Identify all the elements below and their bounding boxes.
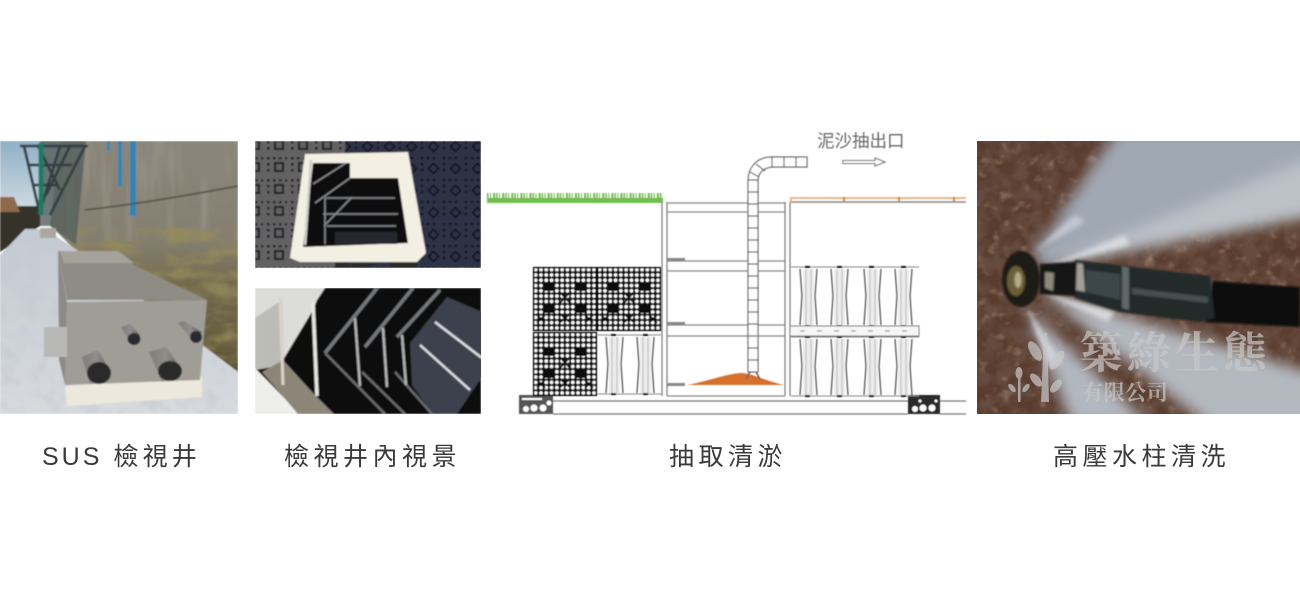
well top: [58, 251, 207, 300]
well side: [58, 251, 67, 385]
inner ladders: [305, 160, 398, 245]
caption 3: 抽取清淤: [669, 443, 787, 471]
building wall: [50, 141, 238, 375]
metal fitting: [1040, 260, 1215, 322]
gravel left: [519, 395, 553, 414]
outlet arrow: [843, 158, 885, 166]
jet cores: [1027, 215, 1130, 368]
lower water jets: [1025, 290, 1300, 430]
nozzle ball: [1002, 251, 1040, 307]
caption 1: SUS 檢視井: [42, 443, 201, 471]
photo: well interior: [255, 287, 482, 414]
left white surfaces: [255, 288, 325, 360]
orange sludge: [687, 373, 784, 385]
roof floor: [0, 229, 238, 414]
shaft brackets: [667, 258, 685, 386]
frame feet: [335, 262, 417, 268]
well floor: [335, 232, 397, 244]
white frame: [290, 152, 426, 262]
filled modules: [533, 267, 661, 396]
wall weathering: [66, 228, 238, 364]
dark interior: [255, 288, 481, 414]
distant machinery: [0, 197, 20, 212]
outlet label: 泥沙抽出口: [817, 131, 904, 151]
black hose: [1205, 281, 1300, 327]
well front: [65, 300, 207, 385]
wall cable: [85, 186, 238, 210]
photo: SUS inspection well: [0, 141, 238, 414]
brown ground: [977, 141, 1300, 414]
photo 1 contents: [0, 141, 238, 414]
ground light grain: [977, 141, 1300, 414]
watermark tree icon: [1007, 333, 1067, 402]
suction hose: [746, 157, 807, 379]
well base: [65, 376, 202, 406]
paving surface: [791, 197, 966, 203]
wood ledge: [262, 360, 334, 414]
watermark company type: 有限公司: [1082, 380, 1168, 405]
open modules right: [790, 267, 919, 396]
inspection shaft: [662, 202, 966, 396]
ground dark grain: [977, 141, 1300, 414]
floor texture: [0, 350, 214, 413]
sky: [0, 141, 60, 216]
distant ground: [0, 206, 40, 252]
steel canopy: [20, 143, 88, 215]
photo 3 contents: [255, 287, 482, 414]
photo: high pressure jet: [977, 130, 1300, 430]
gravel right: [908, 395, 940, 414]
large pipes: [82, 347, 182, 384]
grass surface: [487, 196, 663, 203]
distant well: [40, 228, 56, 238]
watermark: [1007, 329, 1271, 405]
metal rails: [280, 287, 482, 414]
foundation slab: [553, 401, 966, 414]
drainage board left: [255, 141, 355, 268]
shaded wall near canopy: [40, 141, 86, 245]
diagram: sludge extraction section: [487, 131, 966, 414]
drainage board right: [345, 141, 481, 268]
wall streaks: [84, 142, 238, 240]
bottom-left wall: [255, 368, 300, 414]
grey floor panels: [410, 297, 482, 414]
caption 4: 高壓水柱清洗: [1053, 443, 1230, 471]
photo: well top view: [255, 141, 481, 268]
side wall: [255, 300, 284, 370]
caption 2: 檢視井內視景: [284, 443, 461, 471]
well opening: [303, 163, 408, 247]
photo 2 contents: [255, 141, 481, 268]
open module left: [597, 335, 661, 394]
small pipes: [121, 321, 202, 345]
upper water jets: [1033, 130, 1300, 268]
watermark company name: 築綠生態: [1079, 329, 1271, 378]
side pipe: [44, 327, 67, 357]
captions: [42, 443, 1230, 471]
blue downpipes: [107, 141, 136, 216]
